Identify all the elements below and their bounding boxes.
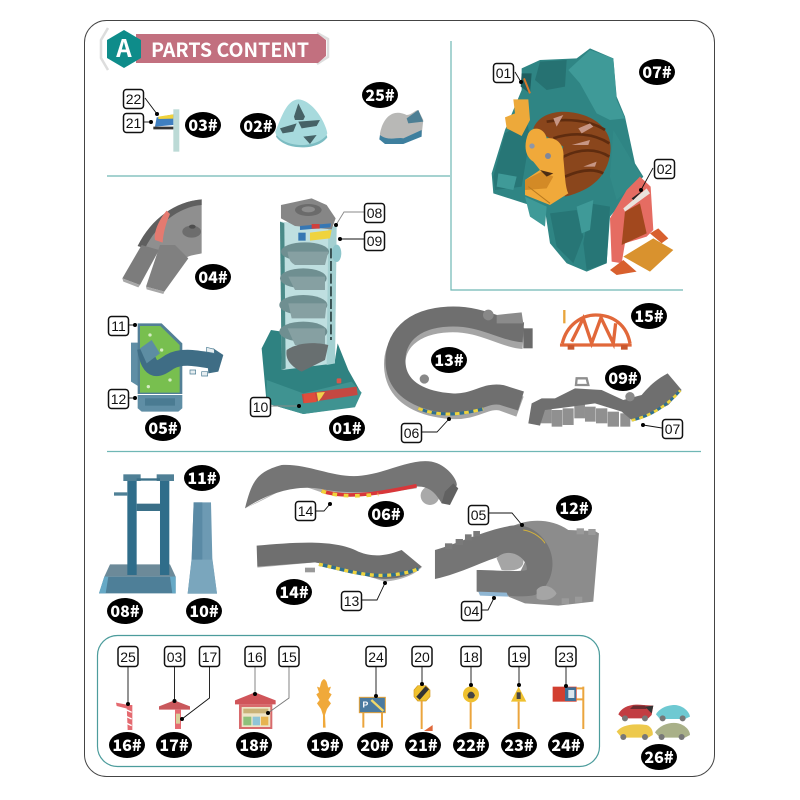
- callout 18: 18: [463, 649, 479, 665]
- callout 09: 09: [367, 233, 382, 249]
- callout 06: [402, 417, 451, 442]
- part number badges: 17#: [159, 732, 189, 756]
- sign 23: triangle sign: [511, 687, 526, 729]
- tube: [280, 222, 337, 370]
- part number badges: 08#: [110, 598, 140, 622]
- callout 01: [494, 64, 523, 84]
- part number badges: 10#: [189, 598, 219, 622]
- part number badges: 06#: [371, 501, 401, 525]
- sign 22: round sign: [463, 686, 479, 729]
- callout 09: [338, 232, 384, 250]
- part number badges: 20#: [360, 732, 390, 756]
- orange face: [525, 129, 568, 205]
- part 12: looped track: [435, 521, 599, 606]
- part 10: post: [188, 502, 217, 594]
- sign 18: shop: [235, 692, 276, 729]
- part 07: mountain: [492, 48, 673, 275]
- brown shell: [533, 112, 611, 197]
- page frame: [84, 20, 714, 776]
- callout 10: 10: [253, 399, 268, 415]
- heading: parts content: A: [115, 29, 132, 64]
- callout 14: [296, 502, 332, 520]
- sign 19: tree: [316, 679, 332, 728]
- callout 11: [108, 316, 137, 336]
- part number badges: 12#: [559, 495, 589, 519]
- callout 03: [164, 646, 184, 703]
- part number badges: 13#: [434, 347, 464, 371]
- callout 13: 13: [344, 593, 359, 609]
- part number badges: 05#: [148, 415, 178, 439]
- part number badges: 03#: [188, 112, 218, 136]
- part 01: spiral tower: [262, 198, 362, 414]
- callout 20: [412, 646, 432, 686]
- part number badges: 15#: [634, 303, 664, 327]
- callout 22: [124, 90, 159, 116]
- callout 01: 01: [496, 65, 511, 81]
- part number badges: 14#: [279, 579, 309, 603]
- callout 22: 22: [126, 91, 141, 107]
- callout 04: 04: [464, 603, 479, 619]
- callout 24: [366, 646, 386, 698]
- callout 13: [342, 581, 387, 610]
- callout 07: 07: [665, 421, 680, 437]
- callout 23: [556, 646, 576, 688]
- part number badges: [107, 59, 677, 770]
- part number badges: 09#: [608, 365, 638, 389]
- sign 21: road sign: [414, 686, 433, 731]
- sign 20: parking board: P: [362, 700, 368, 710]
- part number badges: 16#: [112, 732, 142, 756]
- callout 02: 02: [657, 161, 672, 177]
- callout 05: [468, 506, 524, 527]
- callout 03: 03: [167, 649, 182, 665]
- part number badges: 19#: [310, 732, 340, 756]
- part 25: rock: [379, 110, 423, 144]
- callout 08: [334, 204, 384, 227]
- callout 19: 19: [511, 649, 527, 665]
- sign 24: shop sign: [553, 687, 583, 729]
- part 09: toothed track: [528, 373, 682, 427]
- heading: parts content: PARTS CONTENT: [151, 34, 309, 63]
- part 06: red stripe track: [245, 461, 458, 508]
- callout 25: 25: [120, 649, 136, 665]
- part number badges: 23#: [504, 732, 534, 756]
- callout 21: [124, 114, 153, 132]
- callout 16: 16: [247, 649, 263, 665]
- callout 07: [641, 420, 682, 438]
- plank: [623, 238, 673, 272]
- callout 23: 23: [558, 649, 574, 665]
- callout 15: 15: [281, 649, 297, 665]
- callout 10: [250, 398, 301, 416]
- callout 11: 11: [111, 318, 126, 334]
- callout 05: 05: [471, 507, 486, 523]
- part 15: bridge: [560, 310, 632, 350]
- part 13: horseshoe track: [395, 310, 533, 414]
- orange ledge: [505, 99, 530, 136]
- callout 20: 20: [414, 649, 430, 665]
- part number badges: 11#: [187, 465, 217, 489]
- part 05: green board with track: [131, 323, 223, 412]
- callout 12: 12: [111, 391, 126, 407]
- callout 12: [108, 390, 137, 408]
- callout 21: 21: [126, 115, 141, 131]
- pink gate: [610, 177, 653, 263]
- tower top: [281, 198, 336, 229]
- part number badges: 26#: [644, 744, 674, 768]
- cars: [617, 705, 690, 740]
- callout 04: [462, 596, 496, 620]
- sign 17: kiosk: [159, 700, 190, 729]
- part number badges: 02#: [243, 113, 273, 137]
- callout 17: [180, 646, 220, 721]
- callout 02: [639, 160, 674, 192]
- part number badges: 18#: [239, 732, 269, 756]
- part 02: dome: [275, 99, 327, 147]
- callout 17: 17: [202, 649, 217, 665]
- callout 15: [266, 646, 299, 715]
- sign 20: parking board: [359, 697, 385, 728]
- part number badges: 21#: [408, 732, 438, 756]
- part number badges: 22#: [456, 732, 486, 756]
- sign 16: barrier: [116, 703, 132, 730]
- part number badges: 07#: [642, 59, 672, 83]
- heading: parts content: [101, 28, 328, 70]
- callout 18: [461, 646, 481, 687]
- callout 25: [118, 646, 138, 706]
- callout 19: [509, 646, 529, 687]
- part 14: blue stripe track: [257, 543, 422, 582]
- callout 16: [245, 646, 265, 696]
- callout 14: 14: [298, 503, 313, 519]
- part number badges: 04#: [198, 264, 228, 288]
- part 08: tower stand: [99, 474, 176, 593]
- part number badges: 01#: [332, 415, 362, 439]
- part 04: curved switch: [122, 199, 202, 294]
- part 03: post with flag: [153, 109, 179, 152]
- panel: small signs: [98, 636, 600, 766]
- spiral: [279, 242, 329, 342]
- part number badges: 24#: [551, 732, 581, 756]
- callout 06: 06: [404, 425, 419, 441]
- callout 08: 08: [367, 205, 382, 221]
- part number badges: 25#: [365, 82, 395, 106]
- small signs row A: [116, 679, 332, 730]
- tower base: [262, 330, 361, 414]
- callout 24: 24: [368, 649, 384, 665]
